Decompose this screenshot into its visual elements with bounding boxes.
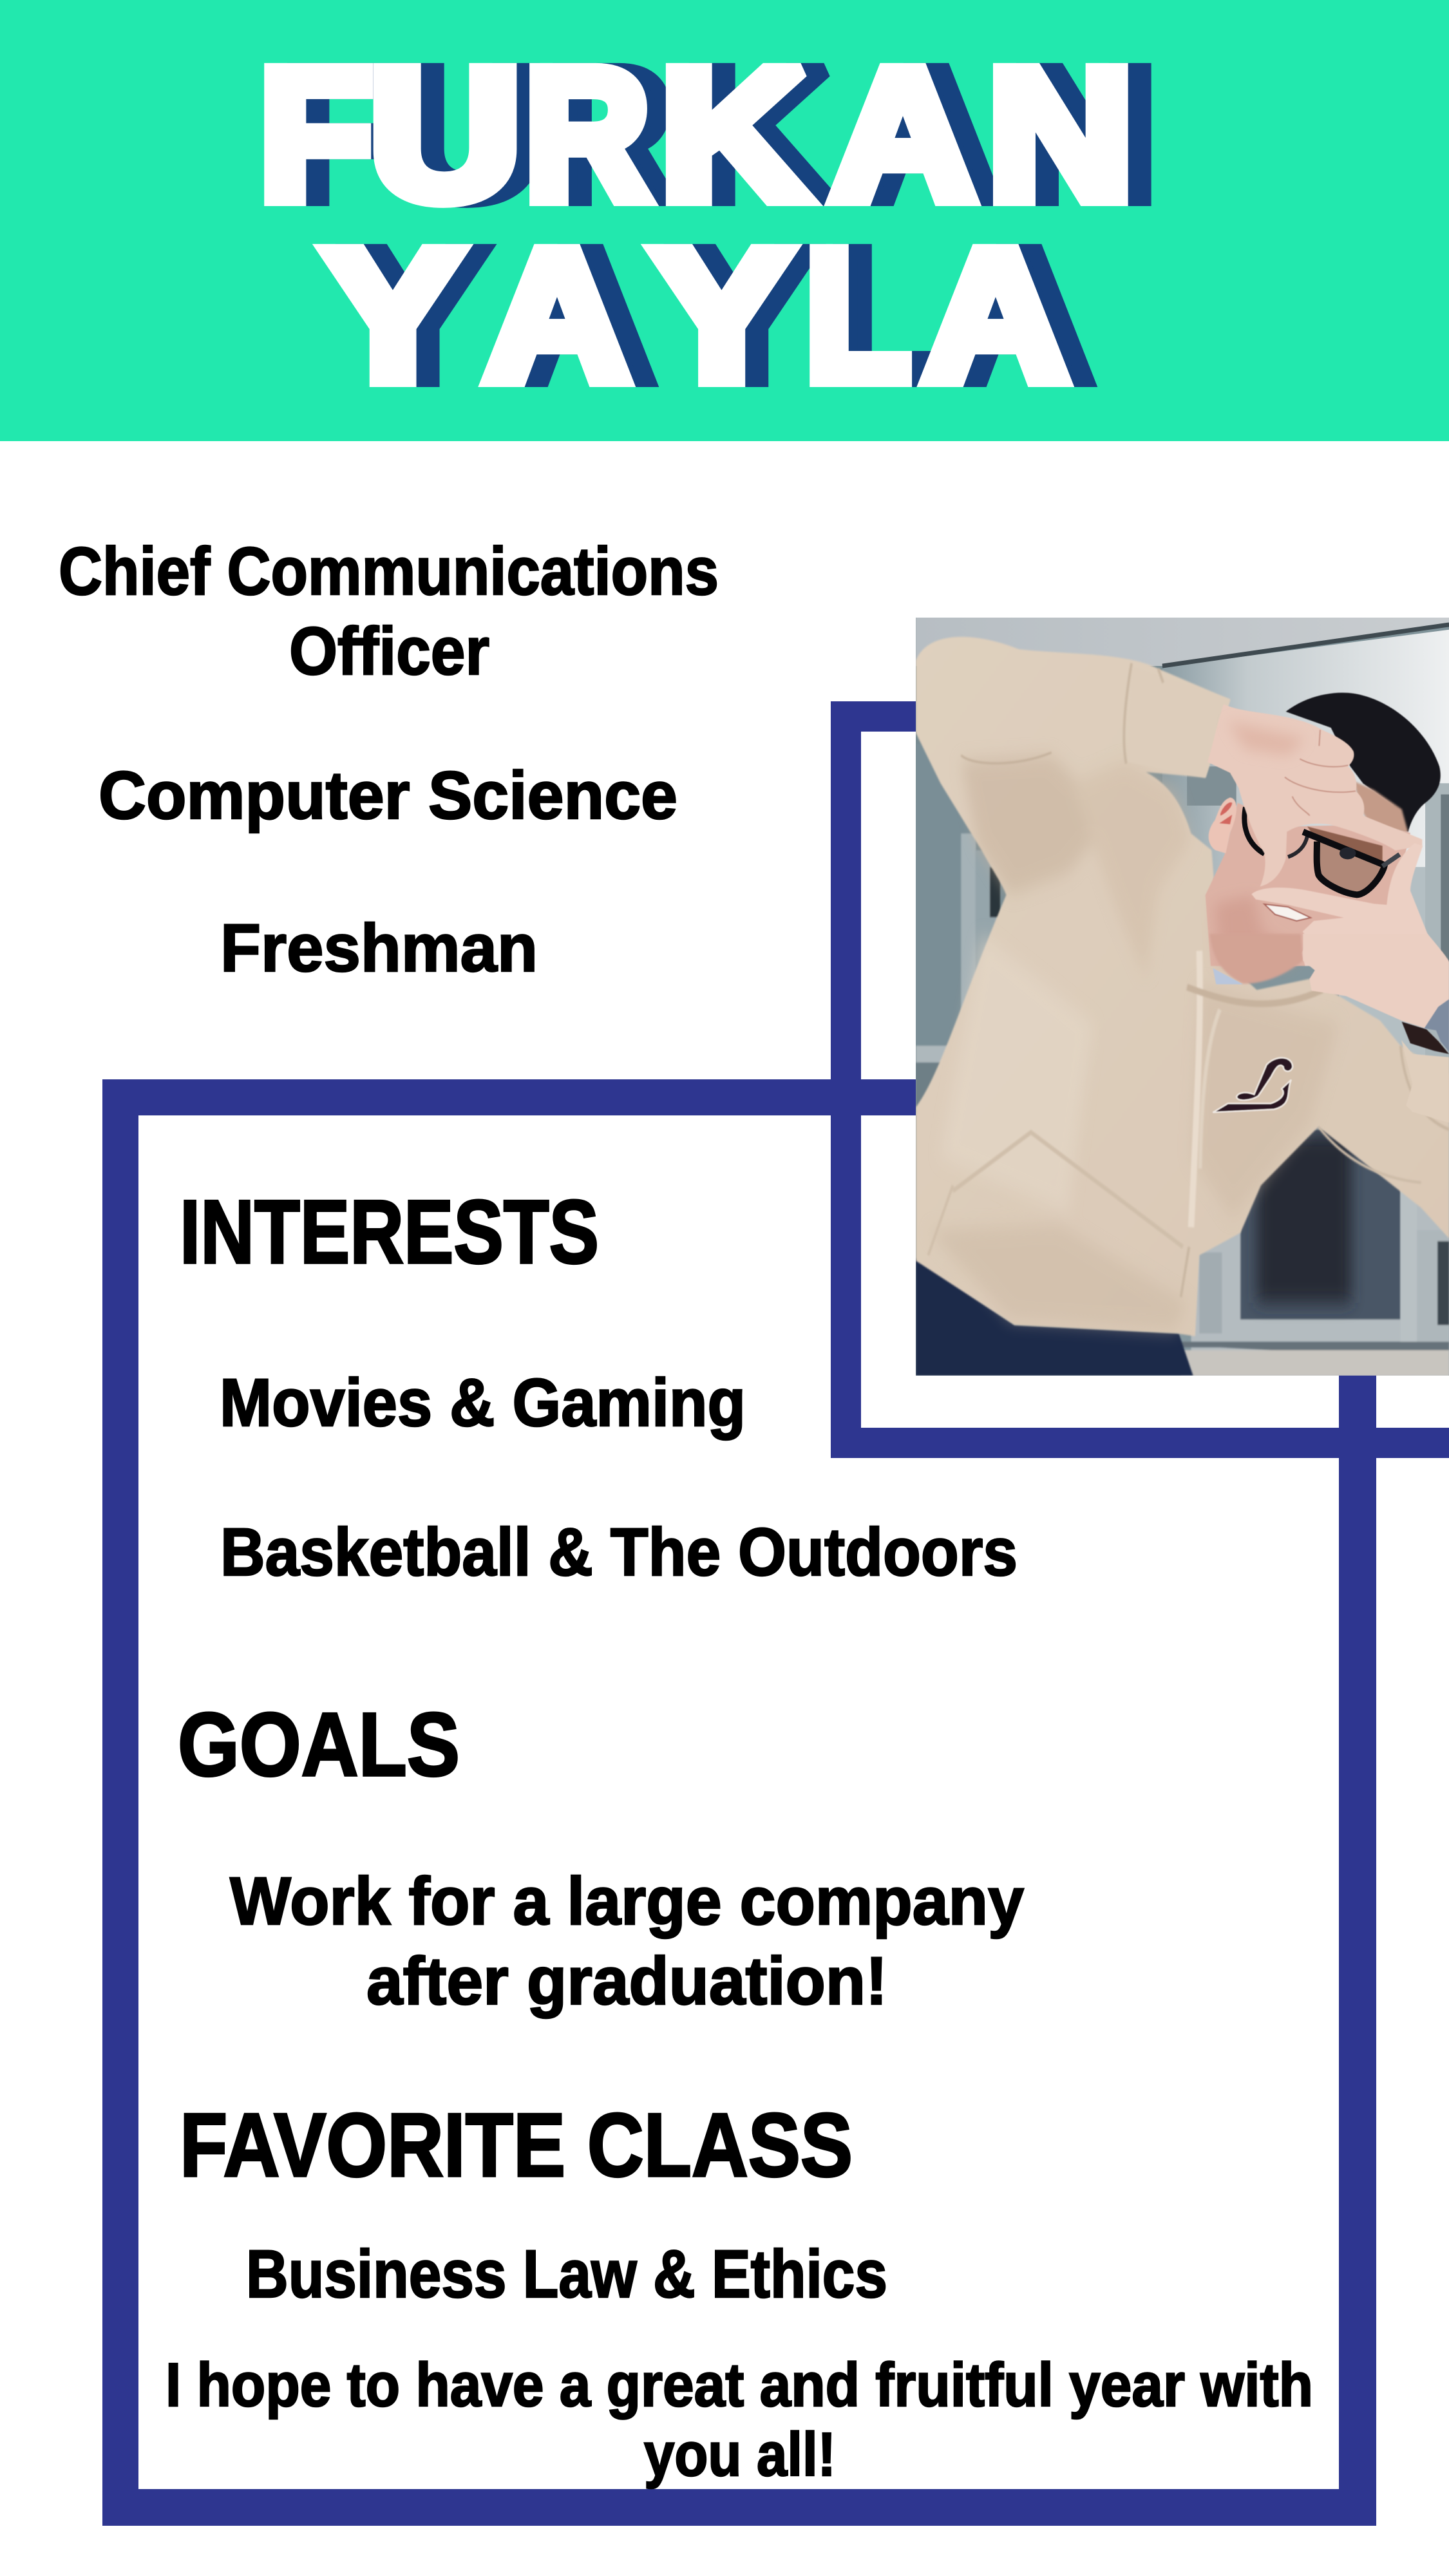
title white letters: Y (324, 212, 462, 419)
title shadow layer: A (947, 212, 1091, 419)
closing message: I hope to have a great and fruitful year with (166, 2351, 1313, 2420)
frame behind photo (831, 701, 1449, 1458)
title white letters: R (525, 31, 649, 238)
title white letters: A (485, 212, 629, 419)
glasses (1244, 807, 1399, 895)
title shadow layer: U (393, 31, 544, 238)
title shadow layer: R (548, 31, 672, 238)
title white letters: F (260, 31, 372, 238)
right sleeve cuff (1401, 1040, 1449, 1122)
upper hand finger creases (1285, 730, 1356, 816)
title: FURKAN YAYLA (260, 31, 1157, 419)
interests section (180, 1181, 1018, 1590)
watch face (1425, 999, 1449, 1052)
forehead (1354, 781, 1408, 833)
lower hand, watch and chest logo (1209, 934, 1449, 1122)
title white letters: N (988, 31, 1133, 238)
goals section (178, 1694, 1024, 2019)
photo background (916, 618, 1449, 1376)
title shadow layer: N (1011, 31, 1157, 238)
interests section: Basketball & The Outdoors (220, 1515, 1018, 1590)
title shadow layer: F (283, 31, 395, 238)
teeth and mouth (1264, 904, 1311, 921)
chest logo (1213, 1057, 1293, 1112)
title shadow layer: L (828, 212, 933, 419)
favorite class section (180, 2094, 887, 2312)
hair (1286, 693, 1441, 832)
chin shadow (1209, 934, 1303, 983)
face (1206, 803, 1410, 966)
closing message: you all! (644, 2420, 836, 2489)
upper hand palm shading (1233, 723, 1300, 756)
title white letters: A (923, 212, 1068, 419)
favorite class section: Business Law & Ethics (246, 2237, 887, 2312)
title shadow layer: A (854, 31, 998, 238)
watch strap (1402, 1022, 1449, 1054)
closing message (166, 2351, 1313, 2489)
role and major text block: Freshman (220, 911, 538, 986)
interests section: INTERESTS (180, 1181, 599, 1282)
lower hand (1251, 843, 1444, 966)
title white letters: A (831, 31, 975, 238)
hand back (1303, 934, 1449, 1028)
photo of Furkan (916, 618, 1449, 1376)
role and major text block: Chief Communications (59, 534, 719, 609)
hoodie shading (928, 755, 1339, 1331)
beige hoodie (916, 637, 1449, 1336)
role and major text block (59, 534, 719, 986)
hoodie folds and cuff (928, 663, 1449, 1297)
interests section: Movies & Gaming (220, 1365, 746, 1441)
favorite class section: FAVORITE CLASS (180, 2094, 853, 2195)
title white letters: K (661, 31, 808, 238)
role and major text block: Computer Science (99, 758, 677, 833)
title shadow layer: K (684, 31, 831, 238)
title white letters: U (370, 31, 521, 238)
ear (1209, 797, 1236, 853)
title shadow layer: Y (676, 212, 814, 419)
upper hand (1208, 704, 1422, 887)
goals section: GOALS (178, 1694, 460, 1795)
area inside finger frame (1307, 826, 1383, 865)
title white letters: Y (652, 212, 791, 419)
main content frame (102, 1079, 1376, 2526)
goals section: after graduation! (366, 1944, 887, 2019)
title shadow layer: Y (347, 212, 485, 419)
role and major text block: Officer (289, 614, 489, 689)
header banner (0, 0, 1449, 441)
title shadow layer: A (508, 212, 652, 419)
title shadow layer (283, 31, 1157, 419)
face shading (1215, 896, 1267, 967)
navy trousers (916, 1258, 1193, 1376)
title white letters (260, 31, 1133, 419)
title white letters: L (805, 212, 910, 419)
goals section: Work for a large company (230, 1864, 1024, 1939)
face, hair, glasses and hands (1206, 693, 1444, 966)
collar (1213, 968, 1243, 984)
